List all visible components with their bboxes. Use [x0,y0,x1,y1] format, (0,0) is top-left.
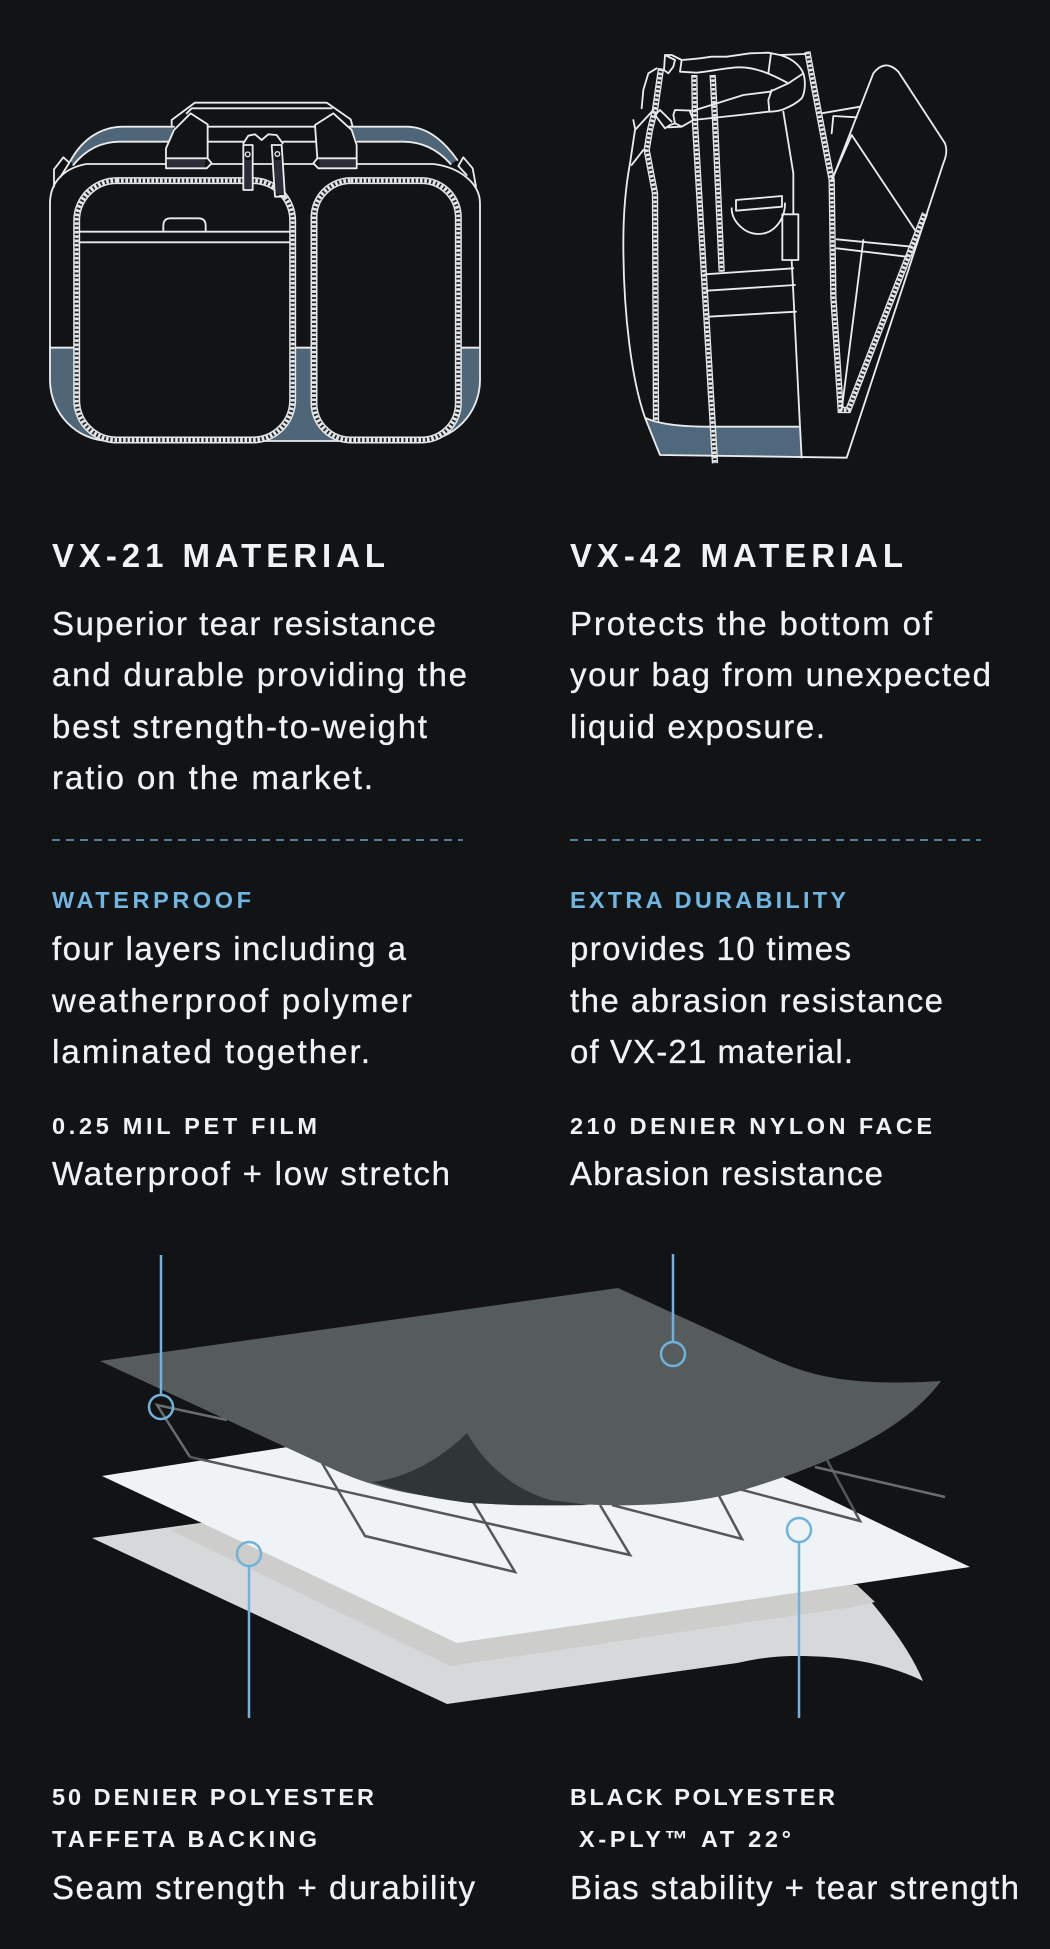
top blue band [70,127,457,165]
left clip [54,157,69,187]
caption: X-ply: BLACK POLYESTER [570,1784,835,1810]
description: VX-21: and durable providing the [52,656,467,693]
description: VX-21: Superior tear resistance [52,605,436,642]
description: VX-21: best strength-to-weight [52,708,427,745]
heading: VX-42 material: VX-42 MATERIAL [570,537,903,574]
stitched seams [647,52,925,463]
layer: PET film [102,1445,970,1643]
backpack outlines [623,53,946,458]
layer note: PET film: Waterproof + low stretch [52,1155,450,1192]
description: VX-21: ratio on the market. [52,759,373,796]
callout line: PET film [149,1255,173,1419]
description: VX-42 [570,605,991,745]
bag body with blue bottom panel [50,164,480,441]
description: VX-42: your bag from unexpected [570,656,991,693]
description: VX-42: liquid exposure. [570,708,825,745]
extra durability text: provides 10 times [570,930,851,967]
waterproof text: four layers including a [52,930,407,967]
carry handle [166,103,357,168]
layer label: PET film: 0.25 MIL PET FILM [52,1113,317,1139]
layer: taffeta backing [92,1523,923,1704]
layer: face fabric [100,1288,941,1505]
illustration: VX-21 duffel bag [50,103,480,441]
caption: taffeta backing: 50 DENIER POLYESTER [52,1784,374,1810]
caption: X-ply: Bias stability + tear strength [570,1869,1019,1906]
waterproof text: laminated together. [52,1033,370,1070]
column: VX-21 material [51,537,467,1192]
illustration: VX-42 backpack [623,52,946,463]
right clip [458,157,476,187]
left zip pocket [77,181,293,440]
right zip pocket [314,181,458,440]
caption: X-ply: X-PLY™ AT 22° [579,1826,791,1852]
callout line: nylon face [661,1254,685,1366]
caption: taffeta backing: Seam strength + durability [52,1869,476,1906]
caption: taffeta backing [52,1784,476,1906]
zipper pulls [243,134,285,197]
layer: X-ply scrim lines [157,1405,945,1572]
heading: VX-21 material: VX-21 MATERIAL [52,537,385,574]
layer label: nylon face: 210 DENIER NYLON FACE [570,1113,932,1139]
column: VX-42 material [570,537,991,1192]
waterproof text [51,930,412,1070]
diagram: exploded material layers [92,1254,970,1718]
extra durability text: of VX-21 material. [570,1033,853,1070]
callout line: X-ply [787,1518,811,1718]
waterproof label: WATERPROOF [52,887,251,913]
layer note: nylon face: Abrasion resistance [570,1155,883,1192]
caption: X-ply [570,1784,1019,1906]
callout line: taffeta backing [237,1542,261,1718]
description: VX-21 [52,605,467,796]
caption: taffeta backing: TAFFETA BACKING [52,1826,317,1852]
extra durability text: the abrasion resistance [570,982,943,1019]
extra durability label: EXTRA DURABILITY [570,887,846,913]
blue bottom panel [645,418,802,457]
waterproof text: weatherproof polymer [51,982,412,1019]
extra durability text [570,930,943,1070]
description: VX-42: Protects the bottom of [570,605,933,642]
